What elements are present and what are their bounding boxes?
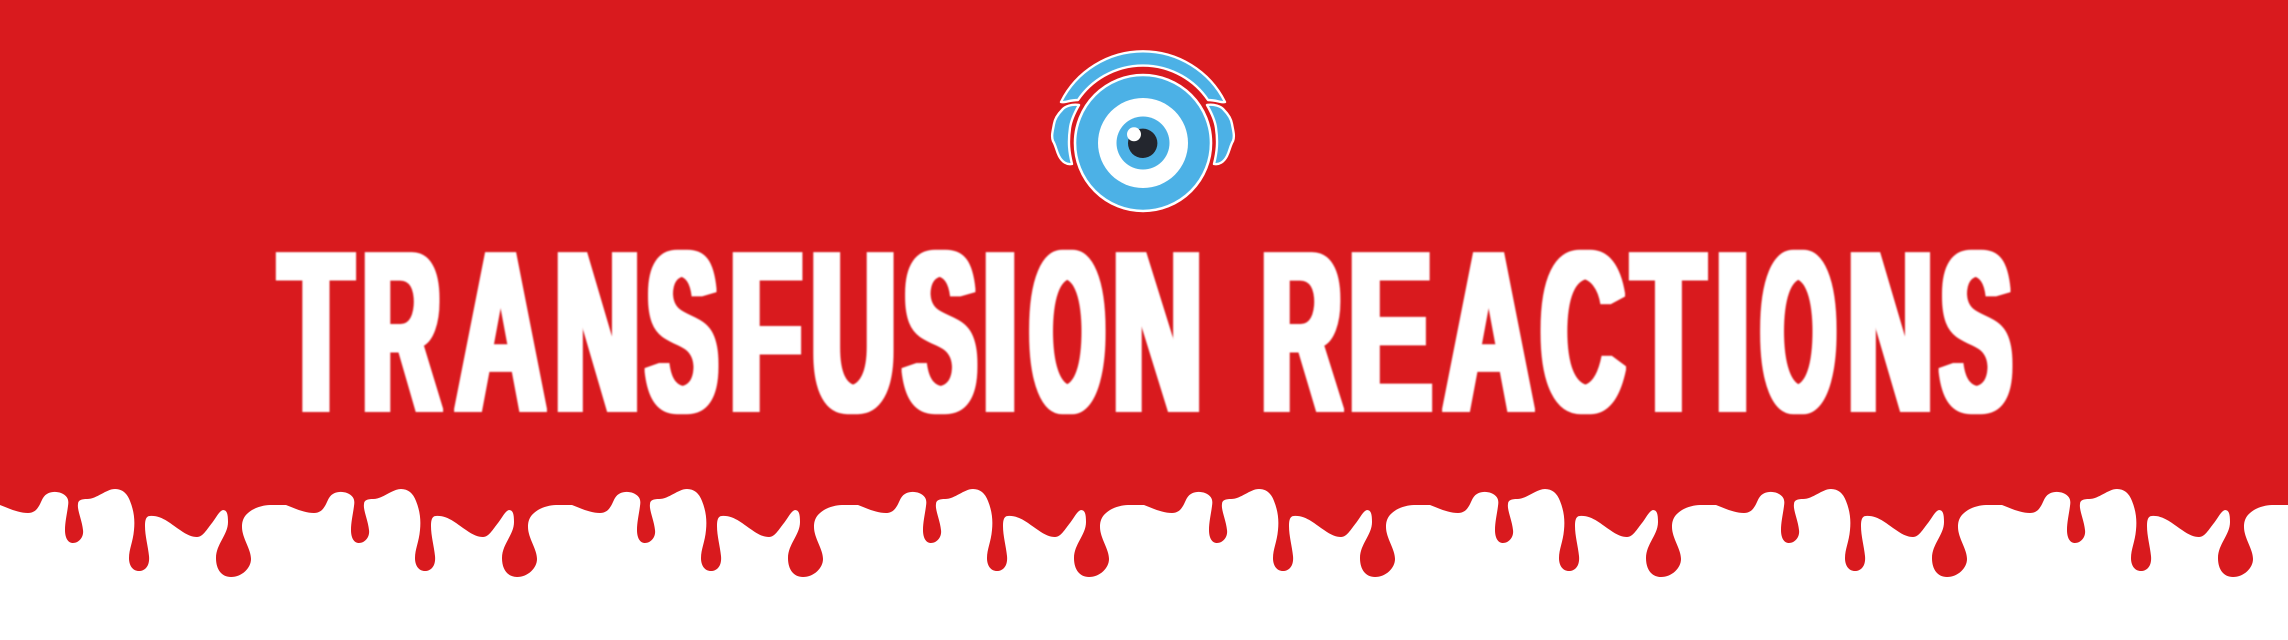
title: N <box>1112 205 1203 459</box>
left ear cup <box>1052 105 1079 164</box>
title: S <box>903 204 977 459</box>
title: I <box>982 205 1018 460</box>
title: E <box>1348 204 1432 459</box>
title: N <box>555 206 640 459</box>
title: F <box>730 206 802 460</box>
headphone band <box>1061 51 1225 102</box>
right ear cup <box>1207 105 1234 164</box>
iris <box>1116 116 1170 170</box>
red background <box>0 0 2288 480</box>
title: S <box>1940 204 2012 459</box>
title: N <box>1848 206 1933 459</box>
title: O <box>1030 206 1105 460</box>
title: R <box>363 205 440 459</box>
icon: eye with headphones logo <box>1052 51 1234 211</box>
title: A <box>1444 204 1533 459</box>
title: T <box>280 204 352 459</box>
title: C <box>1541 205 1624 460</box>
title: T <box>1633 206 1704 460</box>
highlight <box>1127 127 1141 141</box>
title: R <box>1261 204 1341 459</box>
pupil <box>1128 129 1157 158</box>
title <box>280 204 2012 460</box>
sclera <box>1098 98 1188 188</box>
eye outer ring <box>1075 75 1211 211</box>
title: S <box>646 204 718 459</box>
title: O <box>1761 206 1836 460</box>
title: I <box>1716 205 1749 459</box>
title: U <box>811 205 896 460</box>
title: A <box>456 204 545 459</box>
